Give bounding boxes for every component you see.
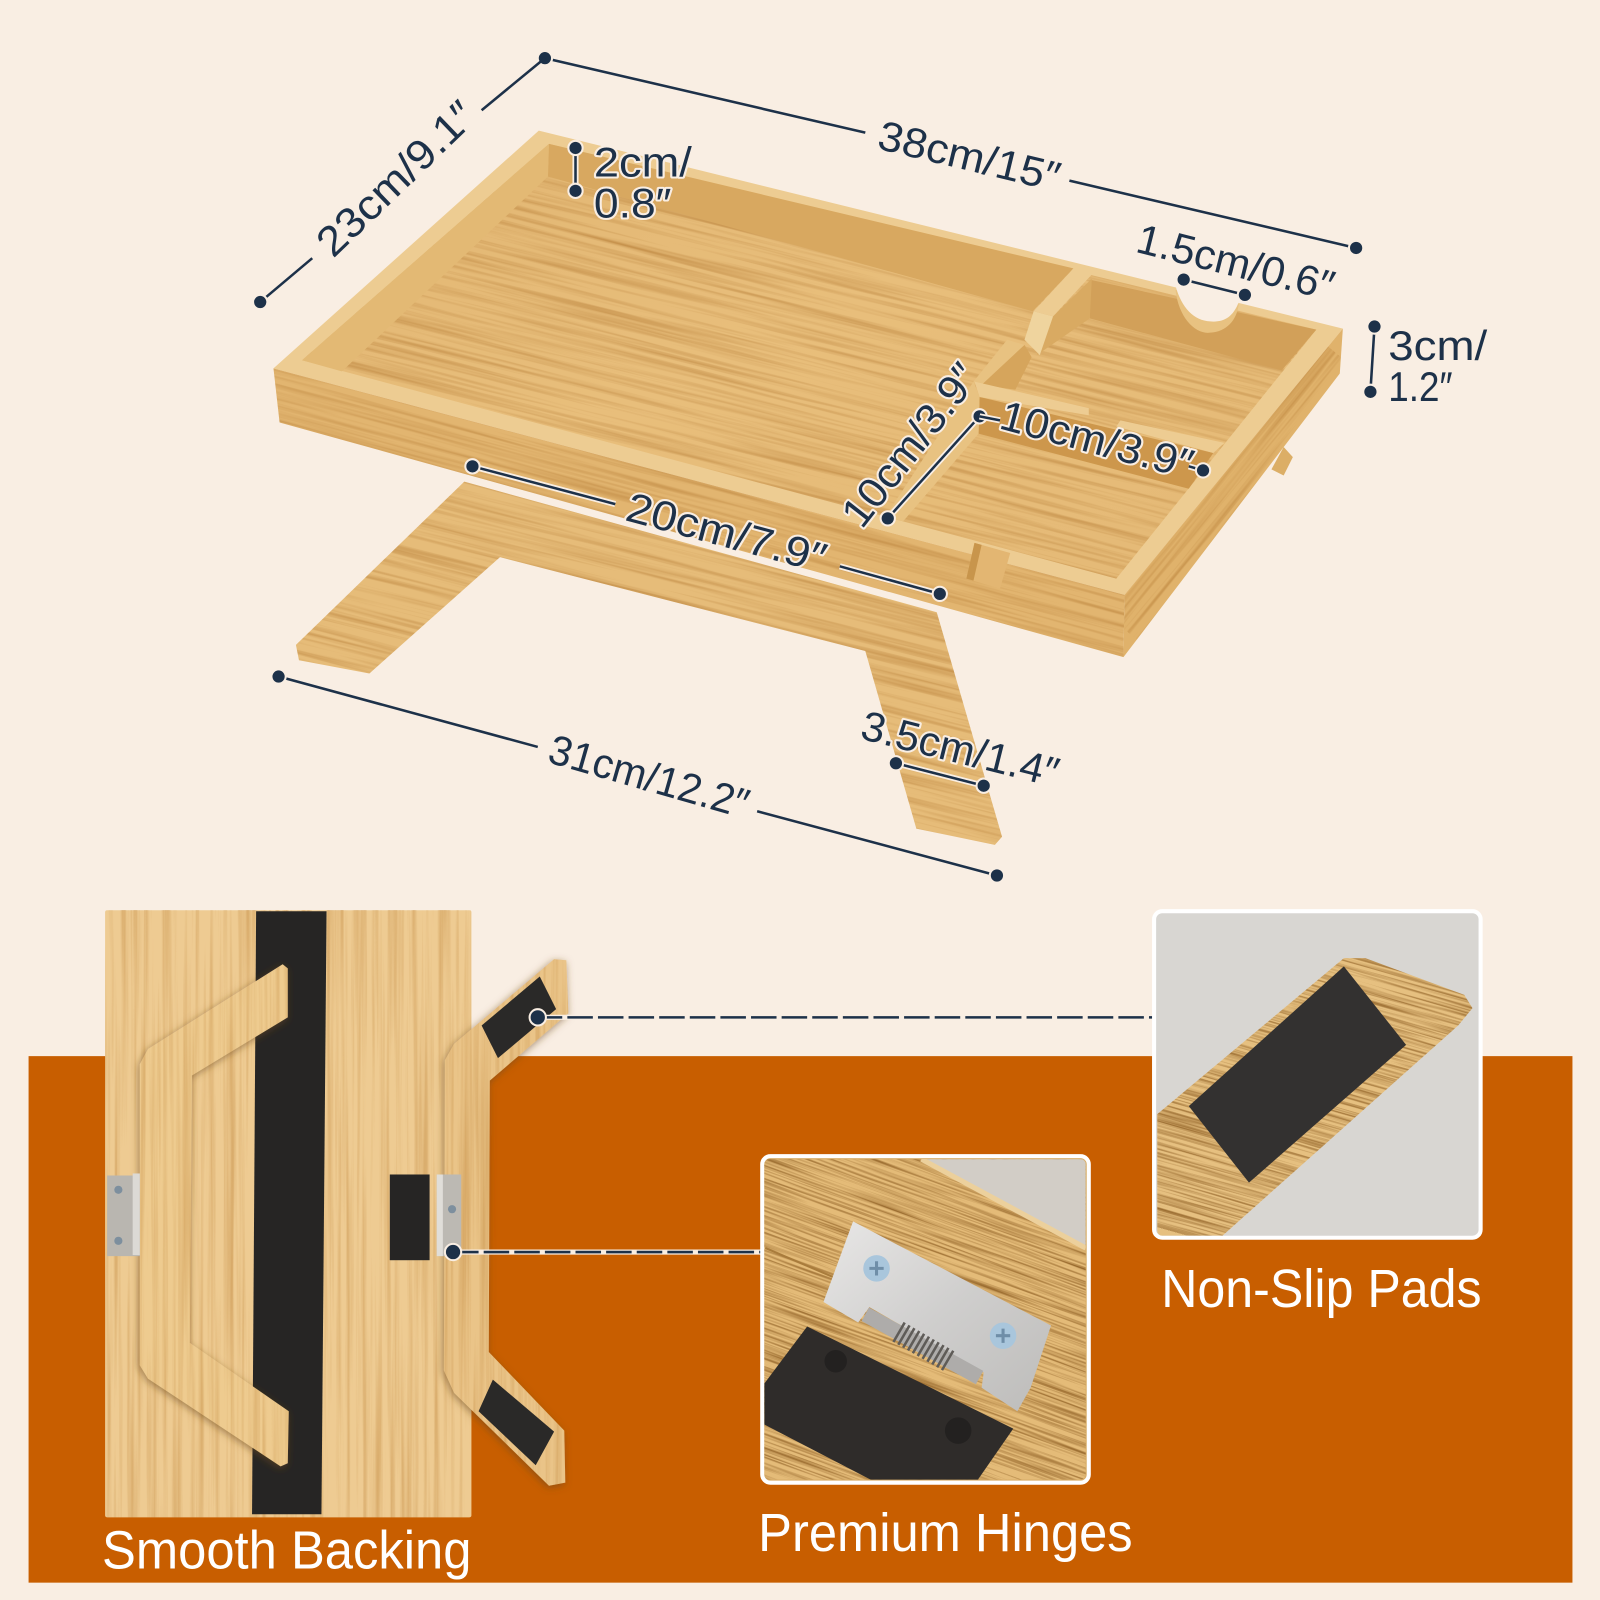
left inner wall	[302, 144, 549, 371]
screws	[863, 1255, 1016, 1349]
callout line: pads	[530, 1009, 1153, 1026]
lower compartment back wall	[979, 397, 1213, 489]
dimension: compartment width: 10cm/3.9″	[995, 391, 1199, 488]
main compartment back wall	[548, 144, 1073, 311]
dimension: compartment depth: 10cm/3.9″	[832, 354, 988, 536]
product back view	[105, 910, 571, 1517]
black backing strip	[252, 911, 327, 1514]
caption: smooth backing: Smooth Backing	[102, 1520, 471, 1580]
front rim notch	[966, 543, 1010, 589]
dimension: compartment span	[465, 459, 947, 601]
board edge	[765, 1247, 833, 1278]
detail photo: non-slip pads	[1152, 909, 1483, 1240]
black pad	[764, 1327, 1013, 1482]
dimension: wall depth: 2cm/	[594, 139, 692, 186]
upper divider	[1024, 268, 1092, 355]
leg tip	[1157, 958, 1472, 1236]
hinge barrel	[865, 1314, 980, 1378]
dimension: leg width: 3.5cm/1.4″	[857, 702, 1064, 796]
tray front face	[273, 368, 1124, 657]
cross divider	[974, 382, 1224, 453]
pad	[1189, 966, 1406, 1183]
rear compartment back wall	[1090, 280, 1316, 370]
upper non-slip pad	[482, 977, 556, 1058]
dimension: overall width: 23cm/9.1″	[307, 91, 485, 265]
middle divider	[973, 340, 1032, 390]
dimension: compartment span: 20cm/7.9″	[621, 483, 832, 582]
left hinge	[107, 1173, 140, 1256]
board edge highlight	[921, 1159, 1086, 1248]
dimension: overall length: 38cm/15″	[874, 111, 1065, 200]
lower non-slip pad	[479, 1380, 554, 1465]
dimension: overall width	[253, 58, 545, 309]
dimension: wall depth	[568, 139, 692, 226]
back leg tip	[1271, 447, 1293, 476]
notch side shadow	[966, 543, 982, 581]
backing board	[105, 910, 471, 1517]
orange panel	[29, 1056, 1572, 1583]
rear wall cable notch	[1176, 286, 1239, 333]
left folding leg	[138, 959, 291, 1469]
dimension: wall depth: 0.8″	[594, 179, 672, 226]
dimension: tray height: 1.2″	[1388, 363, 1453, 410]
tray opening floor	[302, 144, 1316, 579]
hinge spring	[898, 1332, 949, 1361]
dimension: leg span	[271, 669, 1004, 883]
pad screws	[824, 1350, 847, 1372]
dimension: overall length	[538, 51, 1363, 255]
caption: non-slip pads: Non-Slip Pads	[1161, 1259, 1482, 1319]
tray rim	[273, 131, 1343, 595]
bamboo surface	[764, 1159, 1086, 1480]
product: tray with legs	[274, 130, 1343, 845]
floor grain	[311, 176, 1310, 578]
dimension: notch width: 1.5cm/0.6″	[1132, 215, 1340, 309]
right folding leg	[439, 954, 571, 1490]
dimension: tray height	[1363, 319, 1488, 410]
dimension: tray height: 3cm/	[1388, 322, 1488, 369]
right hinge	[437, 1174, 461, 1256]
wall behind	[921, 1159, 1086, 1248]
hinge plate	[823, 1221, 1051, 1411]
black mounting pad	[390, 1174, 430, 1260]
caption: premium hinges: Premium Hinges	[758, 1503, 1133, 1563]
callout line: hinges	[445, 1244, 761, 1260]
detail photo: hinge	[760, 1154, 1091, 1485]
dimension: leg span: 31cm/12.2″	[543, 725, 755, 827]
tray right face	[1123, 329, 1343, 657]
folding leg	[296, 482, 1002, 845]
lower divider	[886, 382, 980, 521]
